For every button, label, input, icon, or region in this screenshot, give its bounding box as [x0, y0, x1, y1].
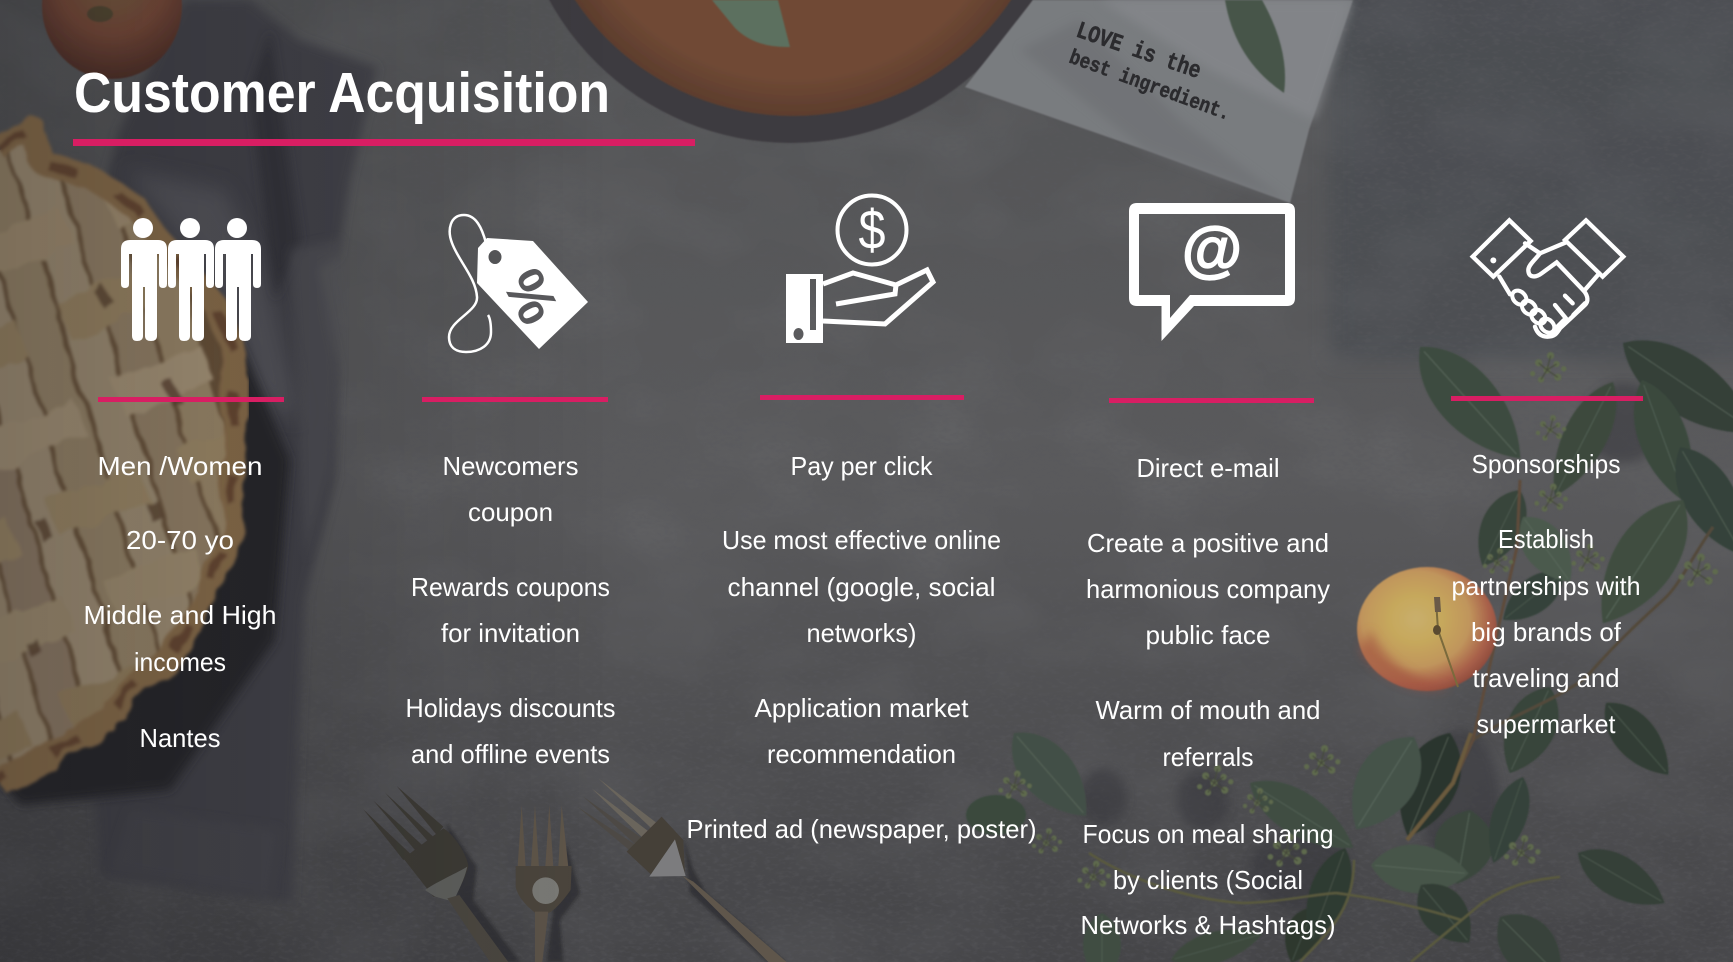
- column: target customers: [84, 218, 284, 753]
- text: customer profile: Men /Women: [98, 451, 262, 481]
- background photo: pie, plate, napkin, forks and leaves on slate: LOVE is the: [1072, 18, 1204, 86]
- text: online and print channels: networks): [806, 618, 916, 648]
- icon: e-mail speech bubble: @: [1182, 215, 1242, 284]
- text: partnerships: partnerships with: [1452, 571, 1640, 601]
- text: e-mail and referrals: Focus on meal sharing: [1082, 819, 1334, 849]
- text: coupon offers: Holidays discounts: [406, 693, 616, 723]
- text: e-mail and referrals: Networks & Hashtags): [1080, 910, 1336, 940]
- text: online and print channels: recommendation: [767, 739, 956, 769]
- column: direct e-mail: [1080, 203, 1336, 940]
- text: online and print channels: Pay per click: [790, 451, 933, 481]
- icon: discount tag: [449, 215, 588, 352]
- text: coupon offers: for invitation: [441, 618, 580, 648]
- text: partnerships: [1452, 449, 1640, 739]
- column: coupons: [406, 215, 616, 769]
- forks: [363, 778, 787, 962]
- text: partnerships: Establish: [1498, 524, 1594, 554]
- text: e-mail and referrals: [1080, 453, 1336, 940]
- divider: [1109, 398, 1314, 403]
- text: online and print channels: Use most effective online: [722, 525, 1001, 555]
- icon: three people: [121, 218, 261, 341]
- text: online and print channels: Application market: [754, 693, 969, 723]
- divider: [760, 395, 964, 400]
- text: partnerships: big brands of: [1471, 617, 1622, 647]
- apple, top left: [42, 0, 182, 79]
- dark napkin: [0, 0, 377, 903]
- text: customer profile: incomes: [134, 647, 226, 677]
- icon: hand holding dollar coin: $: [858, 198, 886, 261]
- text: e-mail and referrals: by clients (Social: [1113, 865, 1303, 895]
- icon: handshake: [1473, 220, 1623, 337]
- title: Customer Acquisition: [74, 61, 610, 125]
- text: partnerships: Sponsorships: [1472, 449, 1620, 479]
- text: online and print channels: channel (google, social: [728, 572, 996, 602]
- text: e-mail and referrals: public face: [1146, 620, 1270, 650]
- text: e-mail and referrals: Create a positive and: [1087, 528, 1329, 558]
- text: e-mail and referrals: Warm of mouth and: [1096, 695, 1320, 725]
- divider: [422, 397, 608, 402]
- divider: [1451, 396, 1643, 401]
- eucalyptus and apple, right: [966, 319, 1733, 962]
- text: coupon offers: and offline events: [411, 739, 610, 769]
- text: coupon offers: coupon: [468, 497, 553, 527]
- text: coupon offers: Newcomers: [442, 451, 578, 481]
- icon: e-mail speech bubble: [1129, 203, 1295, 341]
- text: customer profile: Middle and High: [84, 600, 276, 630]
- text: customer profile: 20-70 yo: [126, 525, 234, 555]
- text: e-mail and referrals: harmonious company: [1086, 574, 1330, 604]
- text: online and print channels: Printed ad (newspaper, poster): [686, 814, 1036, 844]
- text: online and print channels: [686, 451, 1036, 844]
- wooden plate: [515, 0, 1067, 143]
- text: e-mail and referrals: referrals: [1162, 742, 1254, 772]
- column: sponsorships: [1451, 220, 1643, 739]
- text: e-mail and referrals: Direct e-mail: [1136, 453, 1280, 483]
- text: coupon offers: Rewards coupons: [411, 572, 610, 602]
- icon: discount tag: %: [490, 259, 571, 335]
- divider: [98, 397, 284, 402]
- column: pay per click: [686, 196, 1036, 844]
- text: coupon offers: [406, 451, 616, 769]
- text: partnerships: supermarket: [1476, 709, 1616, 739]
- text: customer profile: [84, 451, 276, 753]
- text: partnerships: traveling and: [1472, 663, 1620, 693]
- background photo: pie, plate, napkin, forks and leaves on slate: best ingredient.: [1066, 47, 1233, 127]
- text: customer profile: Nantes: [140, 723, 220, 753]
- paper note: [965, 0, 1353, 203]
- pie with lattice crust: [0, 144, 228, 768]
- icon: hand holding dollar coin: [786, 196, 933, 343]
